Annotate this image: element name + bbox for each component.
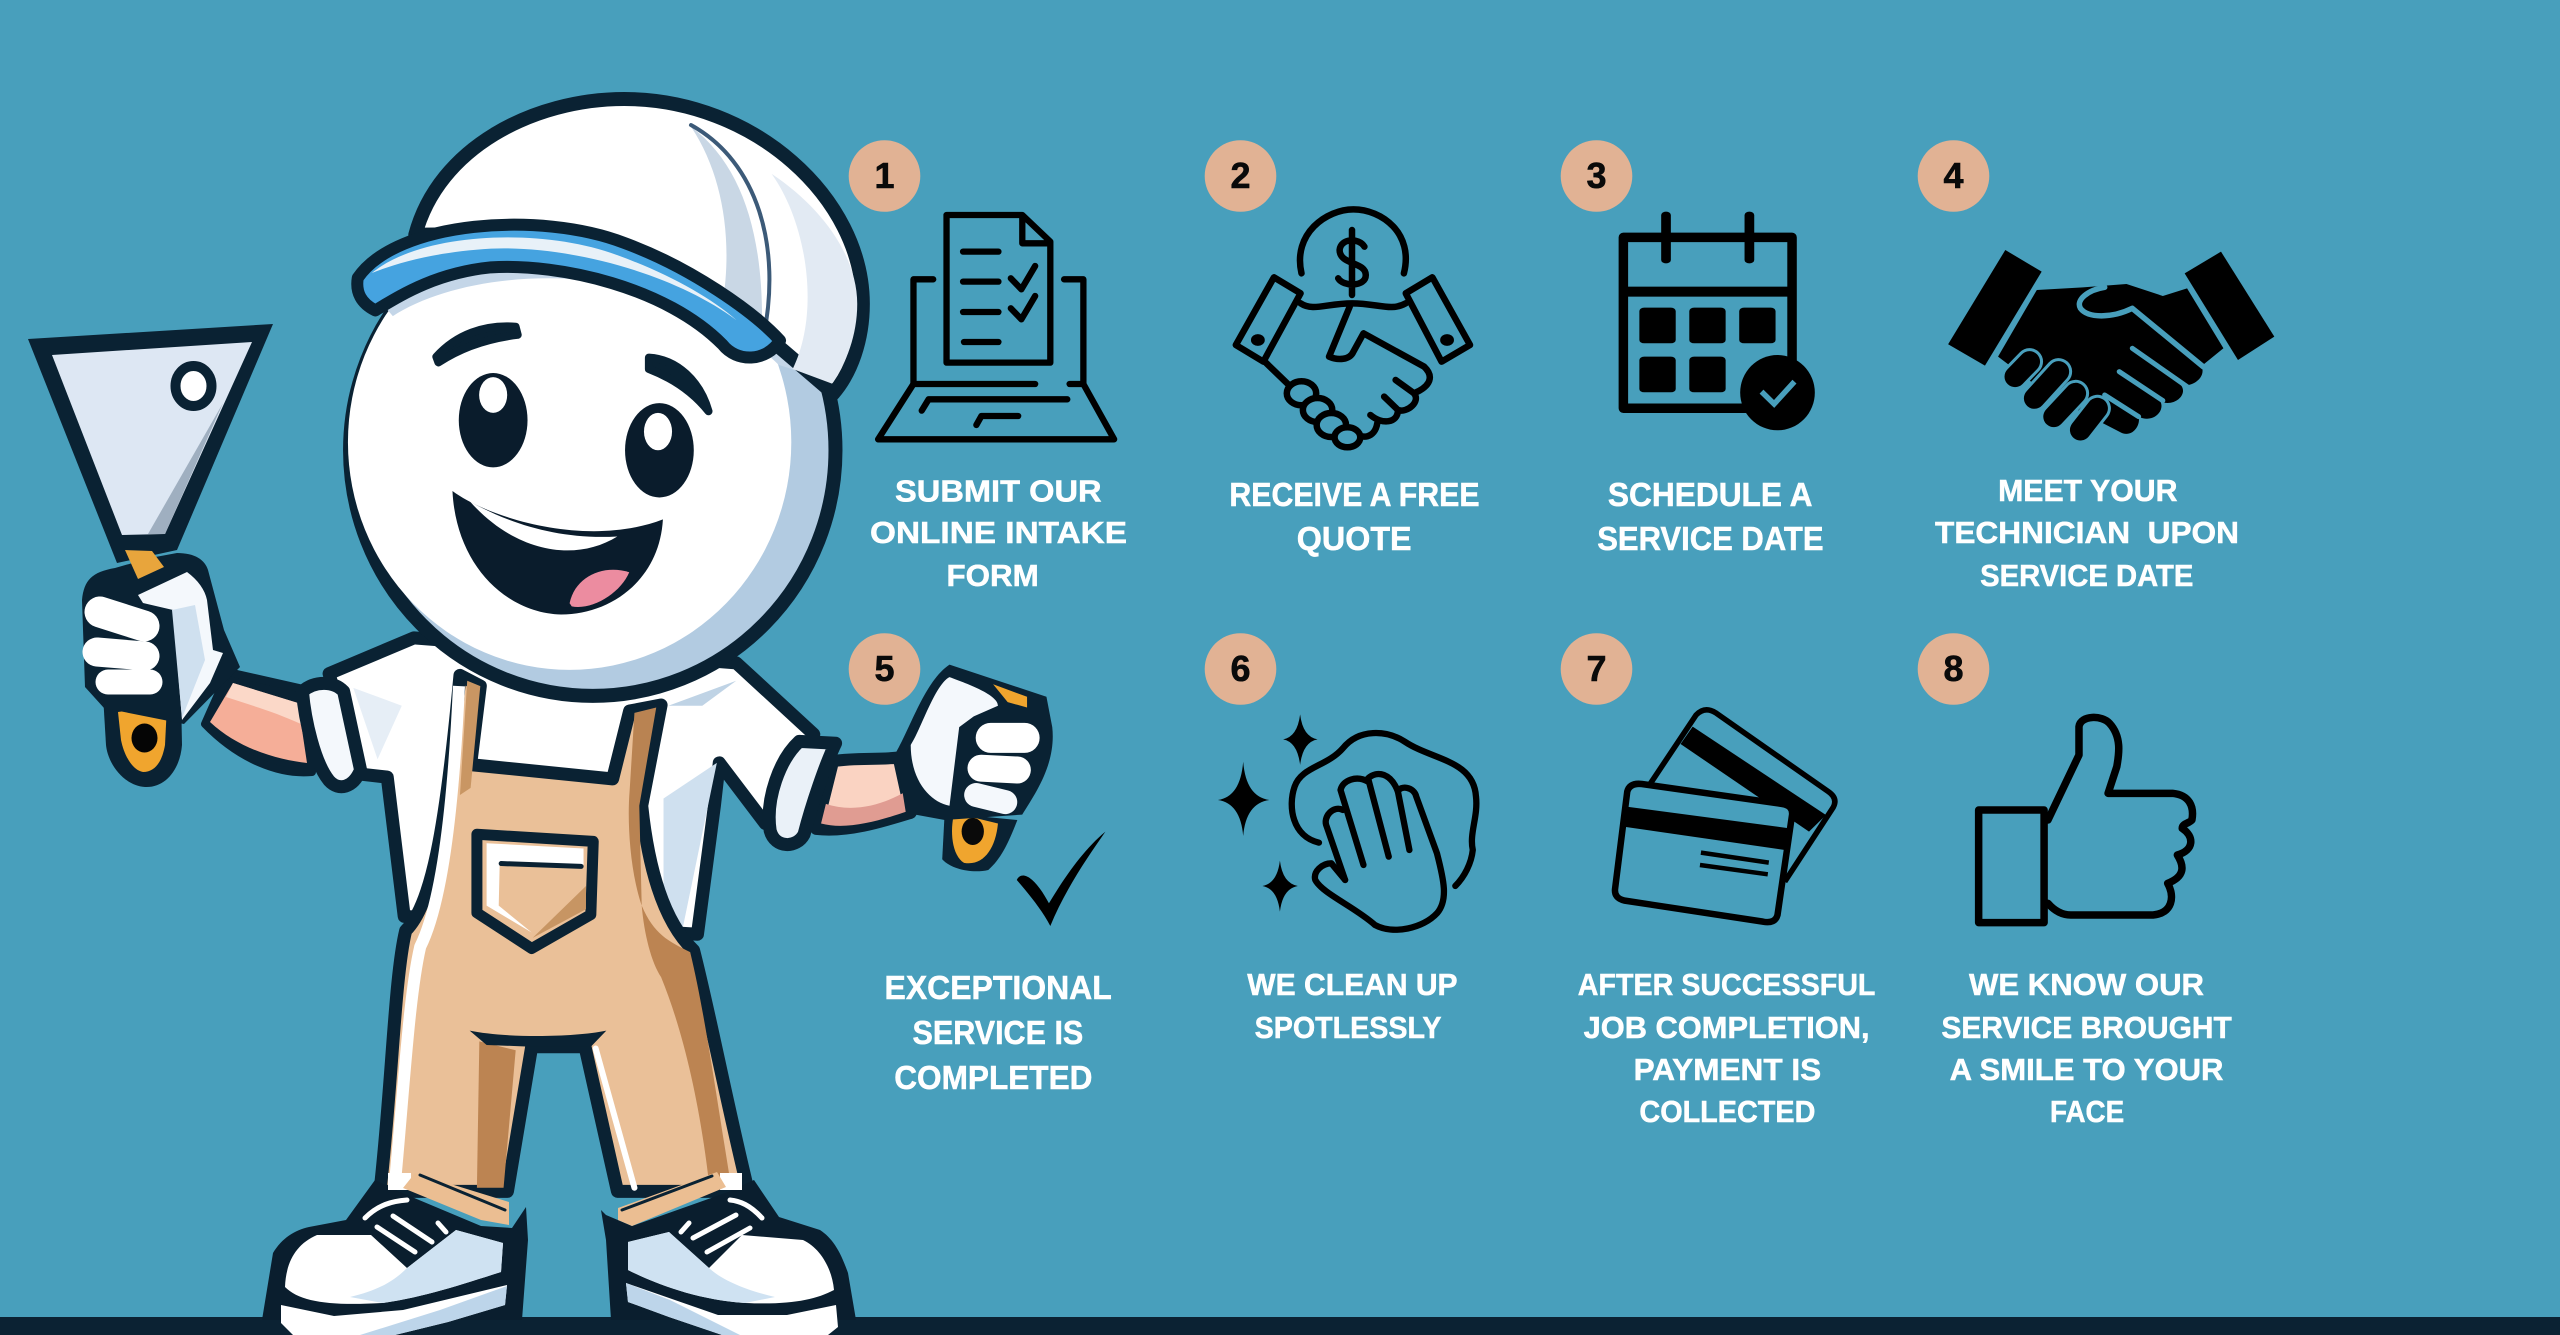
step 4 badge	[1918, 140, 1989, 212]
step 5 text	[884, 969, 1112, 1096]
step 4 badge: 4	[1943, 155, 1964, 196]
overalls	[380, 675, 748, 1191]
step 3 badge: 3	[1586, 155, 1607, 196]
step 8 text: A SMILE TO YOUR	[1950, 1052, 2224, 1087]
step 8 text	[1941, 967, 2232, 1129]
icon: solid handshake	[1948, 250, 2274, 434]
step 1 badge	[849, 140, 920, 212]
step 1 text: FORM	[946, 558, 1039, 593]
right trouser cuff	[618, 1172, 742, 1226]
step 2 badge	[1205, 140, 1276, 212]
step 3 text	[1597, 476, 1824, 557]
left scraper handle	[103, 695, 182, 787]
step 6 badge: 6	[1230, 648, 1251, 689]
step 1 text: ONLINE INTAKE	[870, 515, 1127, 550]
step 3 text: SCHEDULE A	[1608, 476, 1812, 513]
step 8 text: WE KNOW OUR	[1969, 967, 2204, 1002]
icon: hand wiping with sparkles	[1218, 714, 1476, 930]
step 6 badge	[1205, 633, 1276, 705]
step 7 badge: 7	[1586, 648, 1607, 689]
head	[348, 205, 835, 696]
step 6 text: WE CLEAN UP	[1247, 967, 1458, 1002]
head and cap drawn in head coordinates	[348, 99, 863, 696]
step 2 badge: 2	[1230, 155, 1251, 196]
step 7 text: AFTER SUCCESSFUL	[1578, 967, 1875, 1002]
icon: credit cards	[1615, 710, 1835, 922]
right glove	[896, 665, 1053, 820]
right sleeve cuff	[769, 741, 836, 845]
step 4 text: SERVICE DATE	[1980, 558, 2193, 593]
step 5 text: COMPLETED	[894, 1059, 1092, 1096]
step 5 badge	[849, 633, 920, 705]
step 8 badge: 8	[1943, 648, 1964, 689]
shirt	[329, 638, 814, 934]
cap brim	[357, 225, 780, 358]
left glove	[82, 550, 240, 724]
right arm	[816, 757, 911, 830]
step 7 text: PAYMENT IS	[1634, 1052, 1821, 1087]
face	[436, 326, 709, 615]
step 4 text	[1935, 473, 2239, 593]
step 1 text	[870, 474, 1127, 593]
ground bar	[0, 1317, 2560, 1335]
step 3 badge	[1561, 140, 1632, 212]
step 3 text: SERVICE DATE	[1597, 520, 1824, 557]
step 7 text	[1578, 967, 1875, 1129]
scraper blade	[28, 324, 273, 563]
right scraper handle	[942, 813, 1017, 871]
icon: handshake with dollar coin	[1236, 209, 1470, 447]
left shoe	[262, 1180, 528, 1335]
step 4 text: TECHNICIAN UPON	[1935, 515, 2239, 550]
step 2 text: QUOTE	[1297, 520, 1412, 557]
step 6 text: SPOTLESSLY	[1255, 1010, 1442, 1045]
step 7 text: JOB COMPLETION,	[1584, 1010, 1870, 1045]
step 8 badge	[1918, 633, 1989, 705]
step 2 text	[1229, 476, 1480, 557]
icon: check mark	[1017, 832, 1105, 926]
right shoe	[601, 1180, 856, 1335]
torso and right arm drawn in body coordinates	[302, 638, 1053, 1191]
left arm	[205, 672, 312, 772]
step 6 text	[1247, 967, 1458, 1045]
cap	[415, 99, 863, 393]
icon: calendar with check	[1623, 212, 1815, 430]
left trouser cuff	[388, 1173, 509, 1225]
left sleeve cuff	[302, 683, 361, 787]
icon: thumbs up	[1979, 717, 2193, 923]
step 8 text: FACE	[2050, 1094, 2124, 1129]
step 4 text: MEET YOUR	[1998, 473, 2178, 508]
step 8 text: SERVICE BROUGHT	[1941, 1010, 2232, 1045]
step 5 badge: 5	[874, 648, 895, 689]
step 7 badge	[1561, 633, 1632, 705]
step 7 text: COLLECTED	[1639, 1094, 1815, 1129]
step 5 text: EXCEPTIONAL	[884, 969, 1112, 1006]
icon: laptop with checklist form	[878, 215, 1114, 439]
overalls pocket	[477, 834, 593, 949]
step 1 badge: 1	[874, 155, 895, 196]
mascot: smiling technician in overalls holding a scraper	[28, 99, 1053, 1335]
step 2 text: RECEIVE A FREE	[1229, 476, 1480, 513]
step 1 text: SUBMIT OUR	[895, 474, 1102, 508]
step 5 text: SERVICE IS	[912, 1014, 1083, 1051]
